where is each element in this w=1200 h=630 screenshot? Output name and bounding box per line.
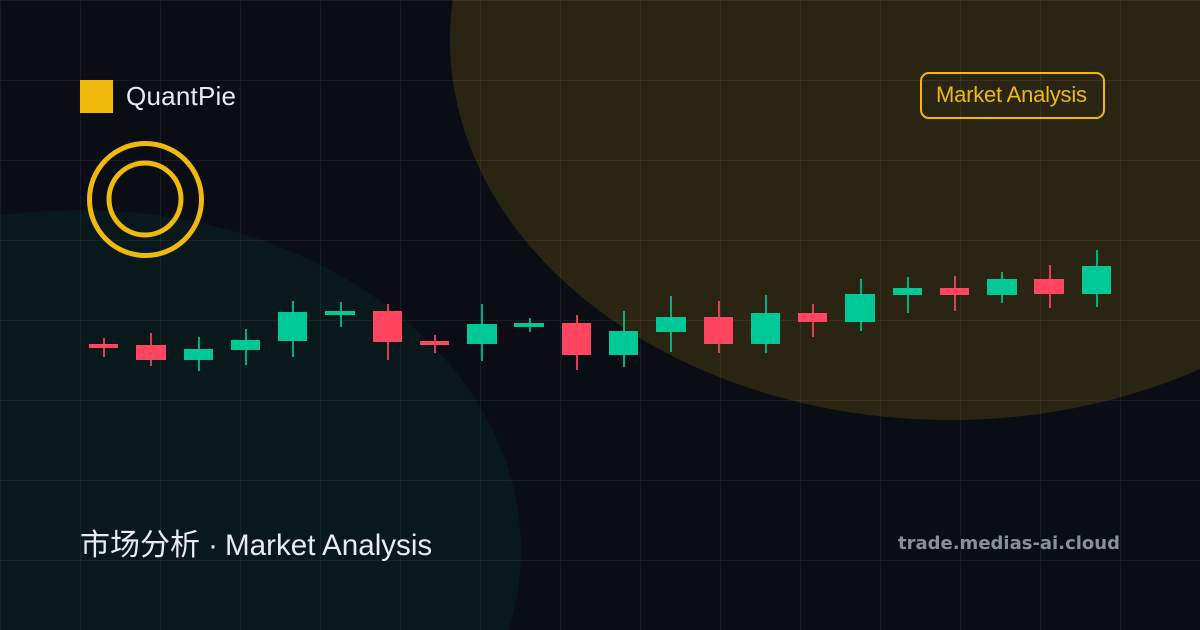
badge: Market Analysis [921,73,1104,118]
candlestick chart [89,250,1111,371]
icon: concentric rings [90,144,202,256]
title: · [208,529,218,562]
badge: Market Analysis: Market Analysis [936,82,1087,107]
brand name: QuantPie [126,81,236,111]
site url: trade.medias-ai.cloud [898,533,1120,554]
title: Market Analysis [225,529,432,562]
title: 市场分析 [80,529,200,562]
background teal blob [0,210,521,630]
logo mark [80,80,113,113]
background yellow blob [450,0,1200,420]
